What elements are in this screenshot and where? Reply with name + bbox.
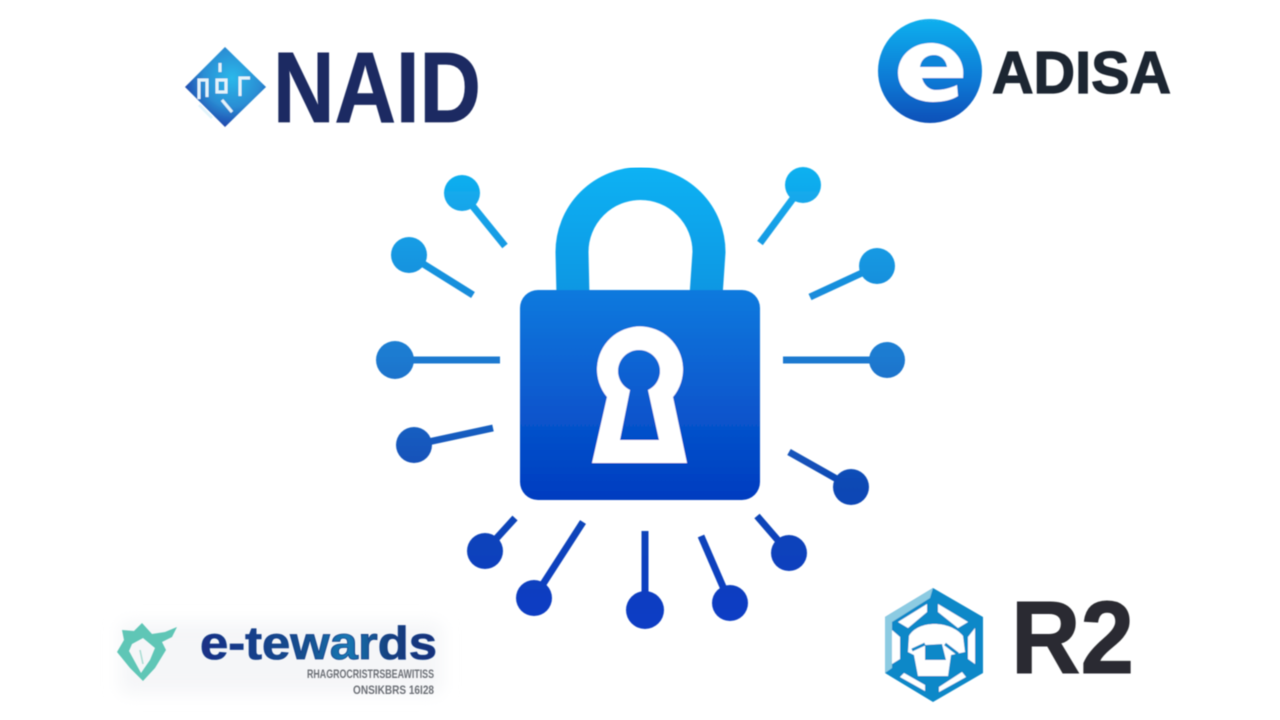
icon: e circle xyxy=(878,19,982,123)
logo backdrop xyxy=(120,622,442,694)
radiating connector nodes xyxy=(376,167,905,629)
hexagon panels xyxy=(892,604,975,692)
e-tewards wordmark: e-tewards xyxy=(200,617,437,669)
NAID wordmark: NAID xyxy=(273,32,481,144)
icon: hexagon emblem xyxy=(885,588,983,702)
padlock body xyxy=(520,290,760,500)
logo: R2 xyxy=(885,580,1134,702)
tagline xyxy=(307,667,434,697)
padlock icon xyxy=(520,184,760,500)
logo: ADISA xyxy=(878,19,1171,123)
logo: NAID xyxy=(185,32,481,144)
ADISA wordmark: ADISA xyxy=(992,40,1171,106)
icon: NAID diamond xyxy=(185,47,266,127)
R2 wordmark: R2 xyxy=(1011,580,1134,695)
tagline: ONSIKBRS 16I28 xyxy=(353,683,434,697)
padlock shackle xyxy=(572,184,709,296)
tagline: RHAGROCRISTRSBEAWITISS xyxy=(307,667,434,681)
logo: e-tewards xyxy=(117,617,442,697)
keyhole xyxy=(592,326,687,463)
icon: teal gem xyxy=(117,623,177,681)
